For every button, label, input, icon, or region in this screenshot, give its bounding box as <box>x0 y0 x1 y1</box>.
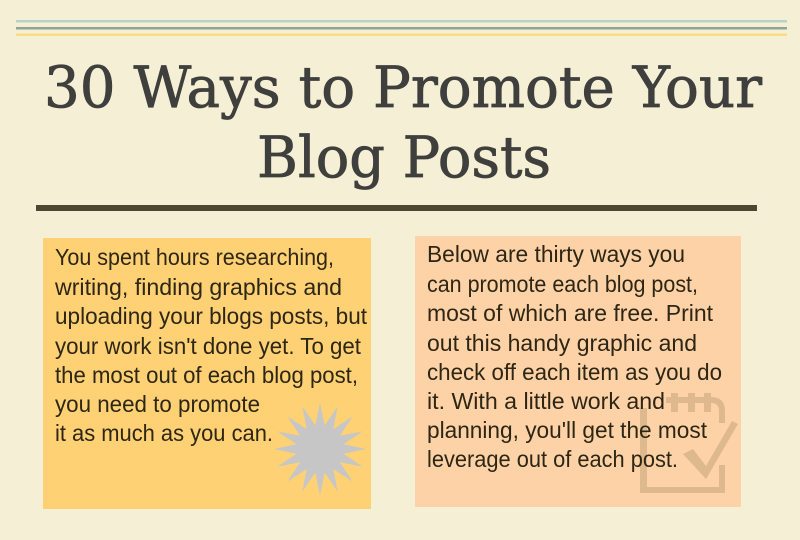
intro text: it as much as you can. <box>55 420 273 446</box>
checklist text: most of which are free. Print <box>427 300 714 326</box>
title: 30 Ways to Promote Your <box>44 55 763 121</box>
intro text: You spent hours researching, <box>55 244 334 270</box>
checklist text: Below are thirty ways you <box>427 241 685 267</box>
panel: intro (yellow) <box>43 238 371 509</box>
checklist text <box>427 241 722 472</box>
checklist text: can promote each blog post, <box>427 271 698 297</box>
icon: checklist notepad <box>640 393 738 493</box>
checklist text: check off each item as you do <box>427 359 722 385</box>
title <box>44 55 763 191</box>
checklist text: leverage out of each post. <box>427 446 678 472</box>
intro text: the most out of each blog post, <box>55 362 358 388</box>
checklist text: it. With a little work and <box>427 388 665 414</box>
title: Blog Posts <box>257 125 551 191</box>
intro text: you need to promote <box>55 391 260 417</box>
checklist text: planning, you'll get the most <box>427 417 708 443</box>
checklist text: out this handy graphic and <box>427 330 697 356</box>
icon: grey starburst <box>274 403 366 495</box>
intro text: writing, finding graphics and <box>54 274 342 300</box>
intro text: uploading your blogs posts, but <box>55 303 368 329</box>
intro text: your work isn't done yet. To get <box>55 333 362 359</box>
intro text <box>54 244 368 446</box>
panel: how to use (peach) <box>415 236 741 507</box>
